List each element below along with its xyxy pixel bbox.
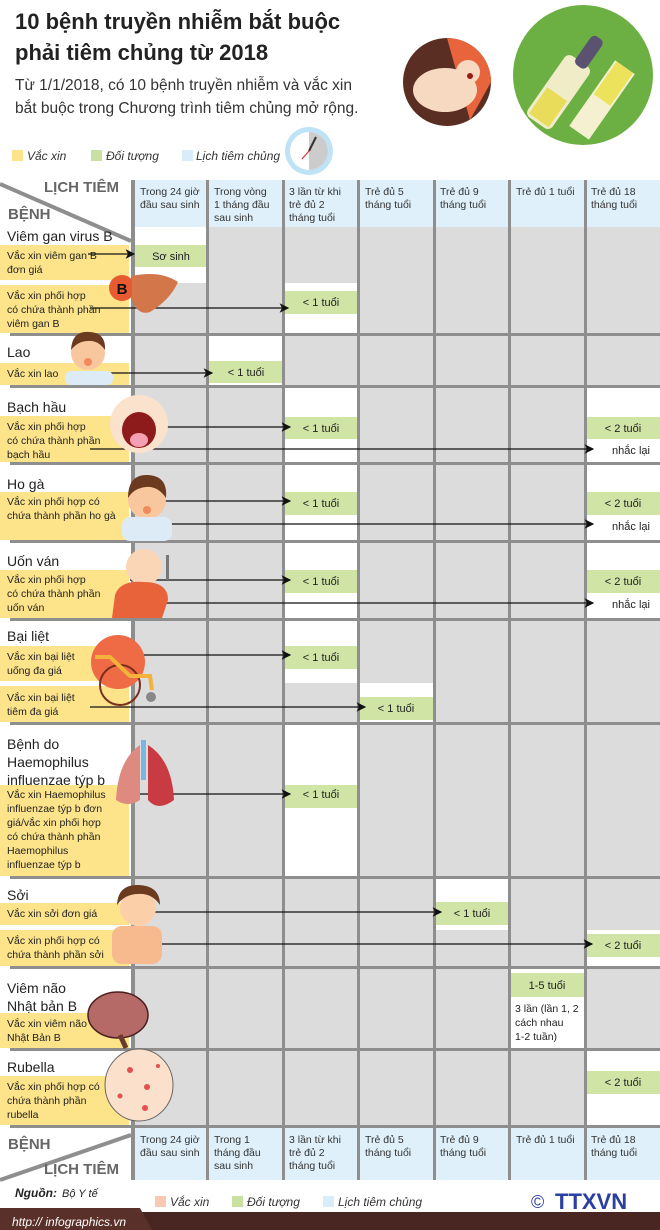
vaccine texts: chứa thành phần ho gà — [7, 510, 116, 522]
header row — [0, 178, 660, 241]
vaccine texts: chứa thành phần sởi — [7, 949, 104, 961]
subtitle: Từ 1/1/2018, có 10 bệnh truyền nhiễm và vắc xin — [15, 77, 352, 94]
legend top — [12, 148, 280, 163]
bottom header: tháng tuổi — [365, 1147, 411, 1159]
legend top: Đối tượng — [106, 149, 159, 163]
bottom header: tháng tuổi — [440, 1147, 486, 1159]
vaccine texts: Vắc xin viêm gan B — [7, 249, 97, 262]
bottom header: Trẻ đủ 1 tuổi — [516, 1134, 575, 1146]
vaccine texts: có chứa thành phần — [7, 304, 101, 316]
bottom header: đầu sau sinh — [140, 1147, 200, 1159]
cell labels: < 2 tuổi — [605, 1077, 641, 1089]
vaccine texts: uống đa giá — [7, 665, 62, 677]
header row: tháng tuổi — [365, 199, 411, 211]
bottom header: LỊCH TIÊM — [44, 1160, 119, 1178]
header row: Trẻ đủ 9 — [440, 186, 479, 198]
header row: trẻ đủ 2 — [289, 199, 325, 211]
cell labels: nhắc lại — [612, 520, 650, 533]
vaccine texts: giá/vắc xin phối hợp — [7, 816, 101, 829]
disease titles: influenzae týp b — [7, 772, 105, 788]
cell labels: < 1 tuổi — [303, 423, 339, 435]
legend top: Vắc xin — [27, 148, 67, 163]
vaccine texts: có chứa thành phần — [7, 831, 101, 843]
vaccine texts: uốn ván — [7, 602, 45, 614]
cell labels: < 1 tuổi — [378, 703, 414, 715]
disease titles: Lao — [7, 344, 31, 360]
icon: liver virus: B — [117, 281, 128, 298]
icon: brain — [88, 992, 148, 1048]
subtitle — [15, 77, 358, 117]
header row: Trẻ đủ 18 — [591, 186, 636, 198]
disease titles: Sởi — [7, 887, 29, 903]
vaccine texts: Vắc xin phối hợp — [7, 289, 86, 302]
disease titles: Bệnh do — [7, 736, 59, 752]
icon: rubella skin — [105, 1049, 173, 1121]
icon: boy measles — [112, 885, 162, 964]
bottom header: tháng tuổi — [289, 1160, 335, 1172]
bottom header: Trong 24 giờ — [140, 1134, 200, 1146]
vaccine texts: Vắc xin phối hợp — [7, 420, 86, 433]
cell labels: < 2 tuổi — [605, 576, 641, 588]
bottom header: Trẻ đủ 9 — [440, 1134, 479, 1146]
header row: đầu sau sinh — [140, 199, 200, 211]
legend bottom — [155, 1194, 422, 1209]
header row: Trẻ đủ 5 — [365, 186, 404, 198]
icon: baby uon van — [112, 549, 169, 618]
vaccine texts: viêm gan B — [7, 318, 60, 330]
cell labels: < 1 tuổi — [454, 908, 490, 920]
bottom header: Trong 1 — [214, 1134, 250, 1146]
header row: tháng tuổi — [289, 212, 335, 224]
vaccine texts: Haemophilus — [7, 845, 68, 857]
note viem nao: cách nhau — [515, 1017, 564, 1029]
icon: crying baby — [110, 395, 168, 453]
header row: tháng tuổi — [591, 199, 637, 211]
disease titles: Bạch hầu — [7, 399, 66, 415]
vaccine texts: rubella — [7, 1109, 39, 1121]
vaccine texts: có chứa thành phần — [7, 435, 101, 447]
vaccine texts: Vắc xin sởi đơn giá — [7, 907, 97, 920]
icon: boy ho ga — [122, 475, 172, 541]
disease titles — [7, 228, 113, 1075]
vaccine texts: Vắc xin phối hợp có — [7, 934, 100, 947]
vaccine texts: chứa thành phần — [7, 1095, 87, 1107]
note viem nao — [515, 1003, 579, 1043]
cell labels: nhắc lại — [612, 444, 650, 457]
note viem nao: 3 lần (lần 1, 2 — [515, 1003, 579, 1015]
vaccine texts: Nhật Bản B — [7, 1032, 61, 1044]
bottom header: tháng tuổi — [591, 1147, 637, 1159]
logo TTXVN: © — [531, 1192, 544, 1212]
legend top: Lịch tiêm chủng — [196, 149, 280, 163]
bottom header: Trẻ đủ 18 — [591, 1134, 636, 1146]
cell labels: < 1 tuổi — [303, 576, 339, 588]
icon: wheelchair — [91, 635, 156, 705]
footer bar — [0, 1208, 660, 1230]
cell labels: < 1 tuổi — [228, 367, 264, 379]
icon: baby illustration — [403, 38, 491, 126]
cell labels: nhắc lại — [612, 598, 650, 611]
header row: BỆNH — [8, 205, 51, 223]
cell labels: < 1 tuổi — [303, 297, 339, 309]
green target cells — [135, 245, 660, 1094]
vaccine texts: Vắc xin viêm não — [7, 1017, 87, 1030]
vaccine texts: bạch hầu — [7, 449, 50, 461]
header row: sau sinh — [214, 212, 253, 224]
disease titles: Haemophilus — [7, 754, 89, 770]
source: Bộ Y tế — [62, 1188, 99, 1200]
title: 10 bệnh truyền nhiễm bắt buộc — [15, 9, 340, 34]
bottom header: Trẻ đủ 5 — [365, 1134, 404, 1146]
header row: 1 tháng đầu — [214, 199, 270, 211]
disease titles: Bại liệt — [7, 628, 49, 644]
bottom header: 3 lần từ khi — [289, 1134, 341, 1146]
legend bottom: Đối tượng — [247, 1195, 300, 1209]
vaccine texts: có chứa thành phần — [7, 588, 101, 600]
logo TTXVN: TTXVN — [555, 1189, 627, 1214]
cell labels: < 2 tuổi — [605, 423, 641, 435]
header row: Trong 24 giờ — [140, 186, 200, 198]
footer bar: http:// infographics.vn — [12, 1215, 126, 1229]
disease titles: Nhật bản B — [7, 998, 77, 1014]
note viem nao: 1-2 tuần) — [515, 1031, 557, 1043]
bottom header: sau sinh — [214, 1160, 253, 1172]
subtitle: bắt buộc trong Chương trình tiêm chủng mở rộng. — [15, 100, 358, 117]
disease titles: Viêm não — [7, 980, 66, 996]
vaccine texts: Vắc xin bại liệt — [7, 691, 75, 704]
legend bottom: Lịch tiêm chủng — [338, 1195, 422, 1209]
vaccine texts: influenzae týp b đơn — [7, 803, 102, 815]
cell labels: < 1 tuổi — [303, 652, 339, 664]
legend bottom: Vắc xin — [170, 1194, 210, 1209]
vaccine texts: influenzae týp b — [7, 859, 81, 871]
vaccine texts: Vắc xin lao — [7, 367, 59, 380]
header row: Trong vòng — [214, 186, 267, 198]
icon: lungs — [116, 740, 174, 806]
bottom header: tháng đầu — [214, 1147, 261, 1159]
cell labels: Sơ sinh — [152, 251, 190, 263]
title: phải tiêm chủng từ 2018 — [15, 40, 268, 65]
vaccine texts: Vắc xin bại liệt — [7, 650, 75, 663]
icon: clock — [285, 127, 333, 175]
vaccine texts: Vắc xin phối hợp — [7, 573, 86, 586]
icon: vaccine circle — [513, 5, 653, 145]
icon: boy lao — [65, 332, 113, 385]
cell labels: < 2 tuổi — [605, 940, 641, 952]
cell labels: < 2 tuổi — [605, 498, 641, 510]
cell labels: < 1 tuổi — [303, 789, 339, 801]
bottom header — [0, 1128, 660, 1180]
vaccine texts: tiêm đa giá — [7, 706, 59, 718]
header row: Trẻ đủ 1 tuổi — [516, 186, 575, 198]
title — [15, 9, 340, 65]
bottom header: trẻ đủ 2 — [289, 1147, 325, 1159]
header row: tháng tuổi — [440, 199, 486, 211]
header row: LỊCH TIÊM — [44, 178, 119, 196]
vaccine texts: Vắc xin phối hợp có — [7, 495, 100, 508]
cell labels: 1-5 tuổi — [529, 980, 565, 992]
header row: 3 lần từ khi — [289, 186, 341, 198]
vaccine texts: đơn giá — [7, 264, 43, 276]
vaccine texts: Vắc xin Haemophilus — [7, 788, 106, 801]
source — [15, 1186, 99, 1200]
arrows — [85, 254, 593, 944]
disease titles: Ho gà — [7, 476, 45, 492]
icon: liver virus — [109, 274, 178, 313]
disease titles: Rubella — [7, 1059, 55, 1075]
cell labels: < 1 tuổi — [303, 498, 339, 510]
bottom header: BỆNH — [8, 1135, 51, 1153]
vaccine texts: Vắc xin phối hợp có — [7, 1080, 100, 1093]
disease titles: Viêm gan virus B — [7, 228, 113, 244]
vaccine texts — [7, 249, 116, 1121]
disease titles: Uốn ván — [7, 553, 59, 569]
yellow vaccine boxes — [0, 245, 129, 1125]
source: Nguồn: — [15, 1186, 57, 1200]
cell labels — [152, 251, 650, 1089]
